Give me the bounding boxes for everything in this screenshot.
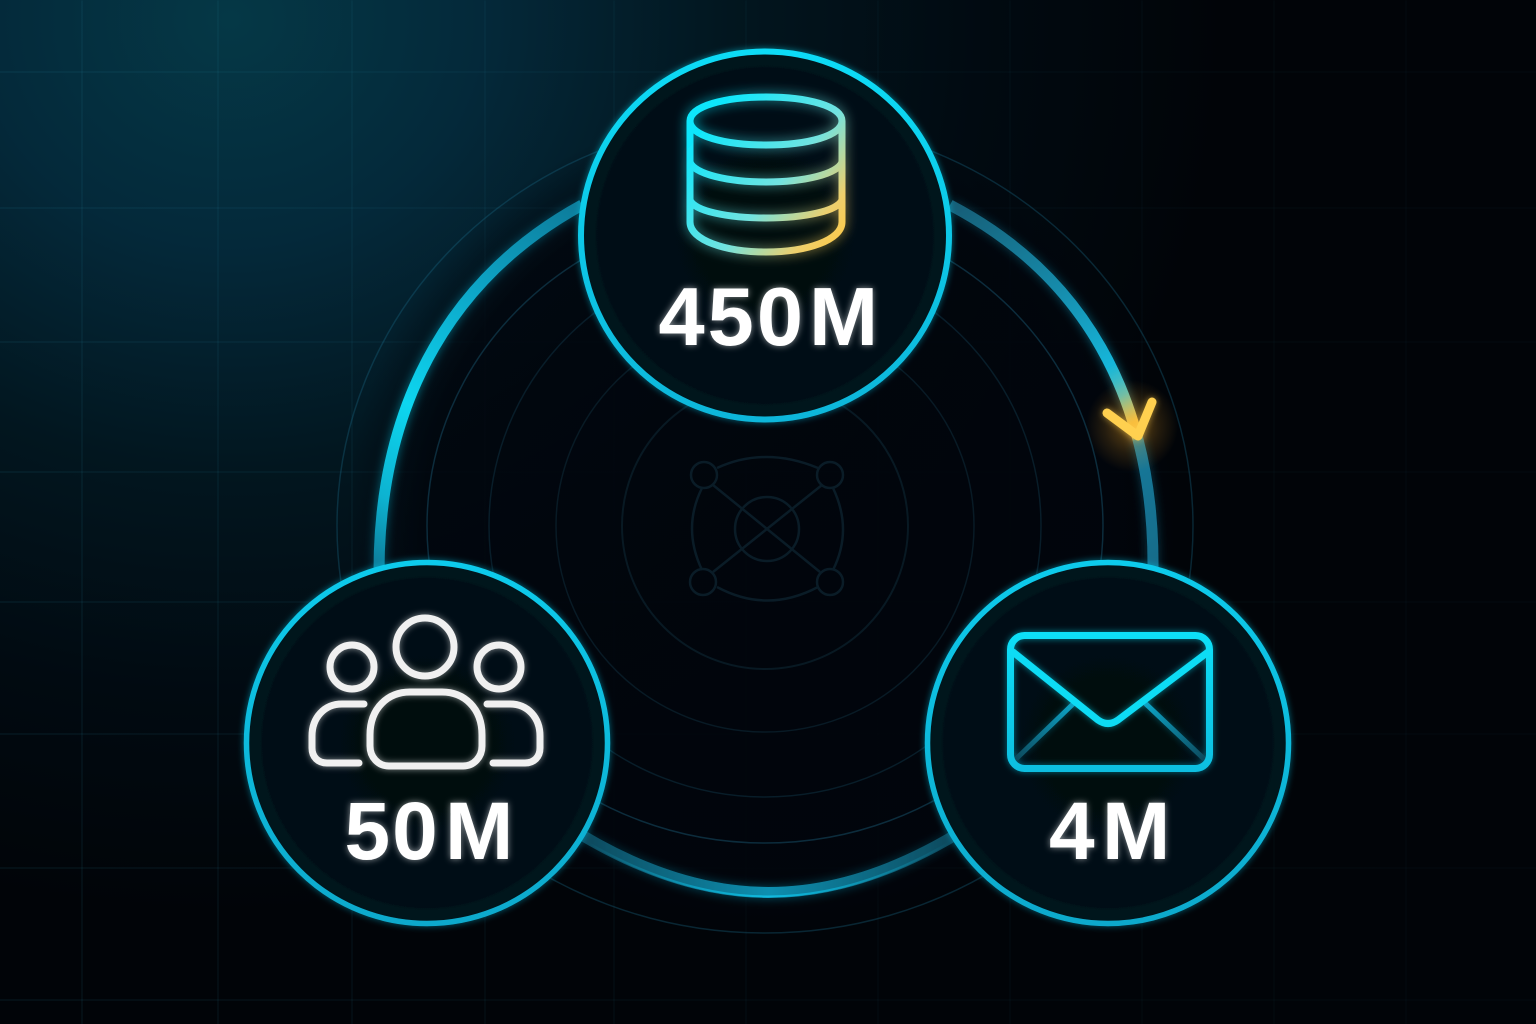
- label: 450M: 450: [658, 270, 806, 363]
- node: 4M mail: [928, 562, 1288, 924]
- center network emblem: [690, 457, 843, 600]
- label: 50M: 50: [344, 786, 440, 877]
- icon: envelope: [1010, 636, 1210, 768]
- faint concentric circles: [337, 119, 1193, 933]
- label: 50M: M: [445, 786, 513, 877]
- icon: database: [690, 97, 842, 252]
- label: 4M: 4: [1049, 786, 1095, 877]
- main cycle ring: [379, 205, 1153, 896]
- icon: people group: [312, 618, 540, 766]
- node: 50M people: [246, 562, 608, 924]
- node: 450M data: [581, 52, 949, 420]
- label: 450M: M: [809, 270, 878, 363]
- label: 4M: M: [1102, 786, 1170, 877]
- arrow: cycle direction: [1086, 380, 1178, 472]
